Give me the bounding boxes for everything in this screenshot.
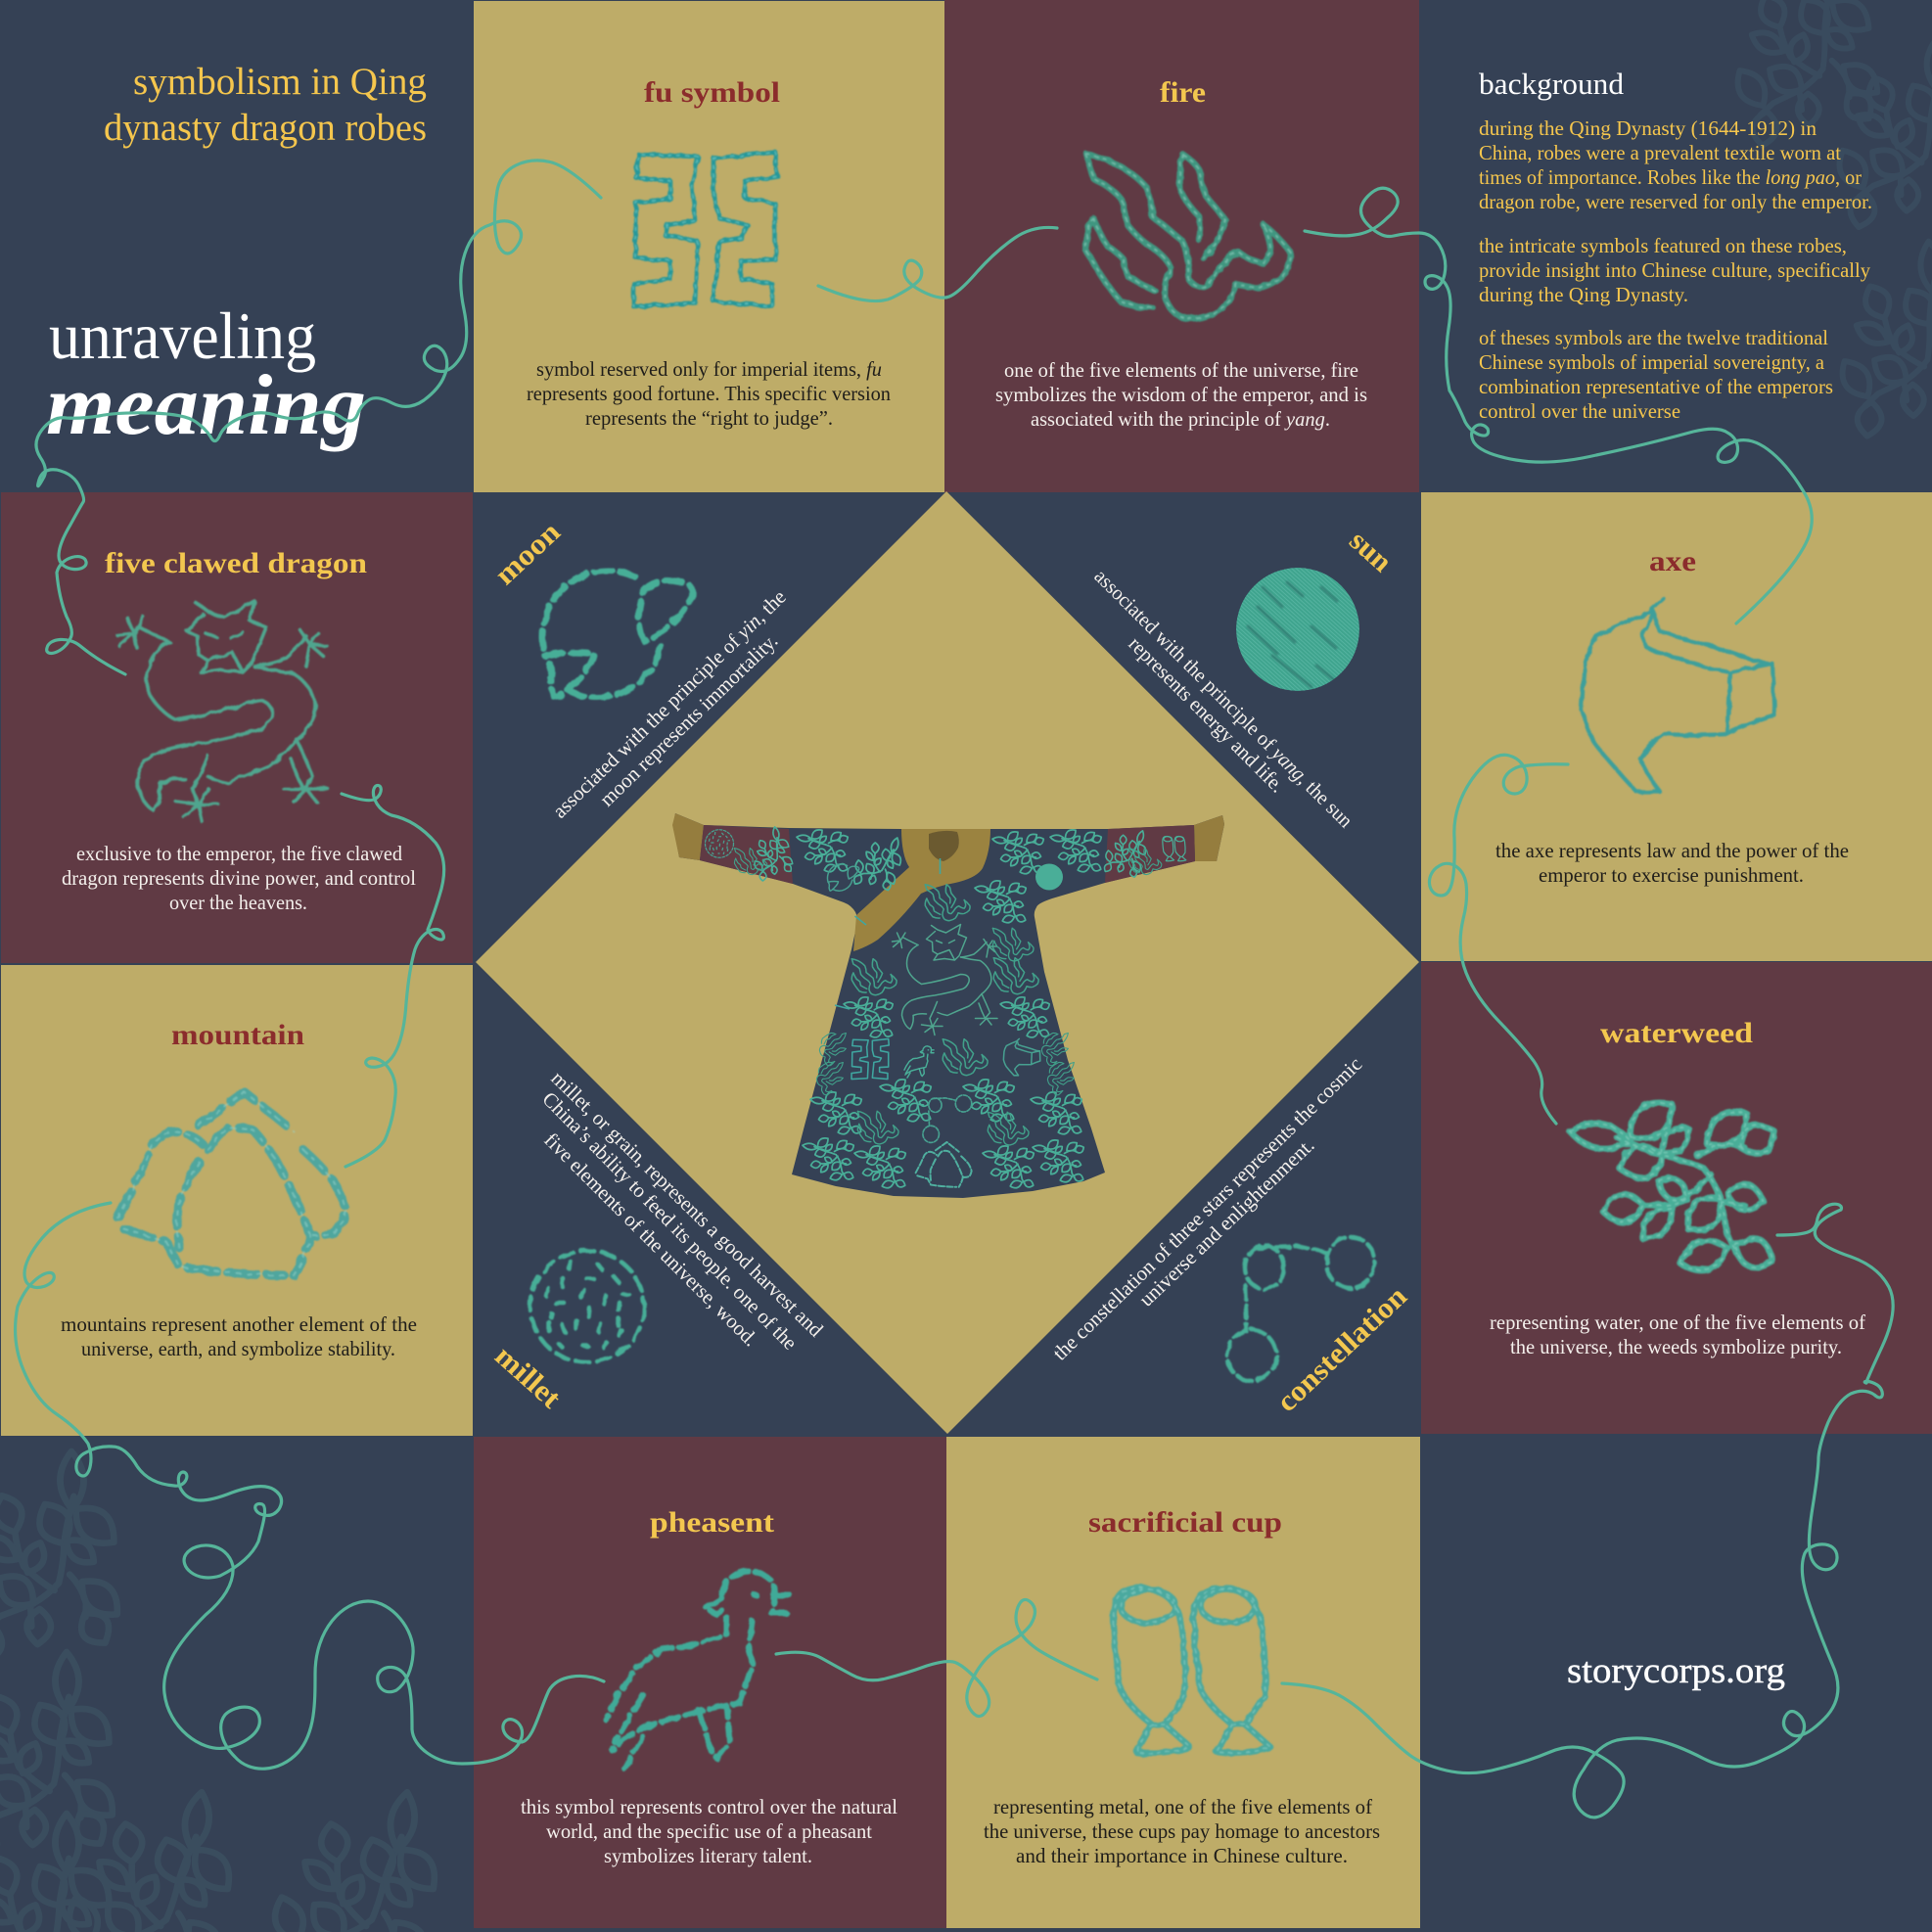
embroidered axe (1003, 1038, 1040, 1076)
paragraphs: background: of theses symbols are the twelve traditional (1479, 326, 1828, 349)
text: sun description: represents energy and life. (1124, 632, 1289, 798)
text: waterweed description: representing water, one of the five elements of (1490, 1311, 1865, 1334)
text: pheasent description (521, 1795, 897, 1867)
heading: waterweed: waterweed (1600, 1017, 1753, 1049)
text: pheasent description: world, and the specific use of a pheasant (546, 1819, 872, 1843)
text: fire description (995, 358, 1367, 431)
icon: constellation (1227, 1237, 1375, 1381)
thread: fu symbol to title to dragon (36, 161, 601, 674)
text: dragon description: over the heavens. (169, 891, 307, 914)
icon: pheasant (606, 1571, 790, 1769)
paragraphs: background: provide insight into Chinese culture, specifically (1479, 258, 1870, 282)
thread: waterweed to axe (1429, 755, 1568, 1124)
text: fire description: one of the five elements of the universe, fire (1004, 358, 1358, 382)
icon: sun (1236, 568, 1359, 691)
text: mountain description: mountains represent another element of the (61, 1312, 417, 1336)
panel: waterweed (1421, 962, 1932, 1434)
heading: fu symbol: fu symbol (644, 76, 780, 109)
corner: millet (488, 1066, 828, 1414)
text: axe description: the axe represents law and the power of the (1495, 839, 1849, 862)
heading: five clawed dragon: five clawed dragon (105, 547, 367, 579)
icon: moon (542, 571, 692, 698)
corner: moon (488, 516, 791, 823)
heading: axe: axe (1649, 545, 1696, 577)
paragraphs: background: during the Qing Dynasty (1644-1912) in (1479, 116, 1817, 140)
text: millet description: China’s ability to feed its people. one of the (537, 1087, 802, 1355)
text: cup description: and their importance in Chinese culture. (1016, 1844, 1348, 1867)
text: fu description: symbol reserved only for imperial items, fu (536, 357, 882, 381)
icon: fu symbol (633, 152, 777, 306)
heading: millet: millet (488, 1340, 567, 1414)
text: fu description: represents good fortune. This specific version (527, 382, 891, 405)
text: sun description: associated with the principle of yang, the sun (1089, 565, 1357, 833)
text: axe description: emperor to exercise punishment. (1539, 863, 1804, 887)
paragraphs: background: control over the universe (1479, 399, 1680, 423)
embroidered mountain (916, 1142, 972, 1187)
thread: pheasant to cup (776, 1599, 1097, 1717)
text: pheasent description: this symbol represents control over the natural (521, 1795, 897, 1818)
right sleeve band (1105, 825, 1195, 883)
paragraphs: background: China, robes were a prevalent textile worn at (1479, 141, 1841, 164)
icon: fire (1086, 155, 1290, 319)
embroidered cups (1163, 837, 1186, 861)
text: pheasent description: symbolizes literary talent. (604, 1844, 812, 1867)
icon: waterweed (1570, 1103, 1774, 1270)
text: waterweed description (1490, 1311, 1865, 1358)
thread: mountain to pheasant (16, 1203, 604, 1769)
text: millet description: five elements of the universe, wood. (539, 1128, 762, 1351)
text: dragon description (62, 842, 416, 914)
icon: axe (1582, 599, 1774, 792)
collar (853, 829, 990, 951)
icon: dragon (117, 601, 328, 822)
heading: fire: fire (1160, 76, 1206, 109)
text: cup description: the universe, these cups pay homage to ancestors (984, 1819, 1380, 1843)
heading: moon: moon (488, 516, 567, 591)
heading: sacrificial cup: sacrificial cup (1088, 1506, 1282, 1539)
text: millet description: millet, or grain, represents a good harvest and (547, 1066, 828, 1342)
embroidered fu (851, 1038, 889, 1080)
robe body (673, 813, 1224, 1198)
main title (46, 299, 366, 453)
main title: unraveling (49, 299, 316, 373)
left cuff (672, 813, 704, 860)
neck opening (929, 831, 959, 861)
central diamond (476, 491, 1419, 1434)
text: dragon description: dragon represents divine power, and control (62, 866, 416, 890)
paragraphs: background: the intricate symbols featured on these robes, (1479, 234, 1847, 257)
text: mountain description (61, 1312, 417, 1360)
text: axe description (1495, 839, 1849, 887)
text: moon description: associated with the principle of yin, the (548, 585, 791, 823)
main title: meaning (46, 358, 366, 453)
panel: fu symbol (474, 1, 944, 492)
embroidered fire (734, 849, 1162, 1145)
paragraphs: background: combination representative of the emperors (1479, 375, 1833, 398)
text block: background (1479, 67, 1872, 423)
panel: mountain (1, 965, 473, 1436)
heading: sun: sun (1343, 525, 1399, 578)
heading: background: background (1479, 67, 1625, 101)
paragraphs: background: during the Qing Dynasty. (1479, 283, 1688, 306)
text: fu description (527, 357, 891, 430)
embroidered constellation (923, 1095, 972, 1142)
embroidered millet (705, 830, 734, 857)
thread: dragon to mountain (342, 785, 444, 1167)
robe ties (835, 858, 940, 1009)
heading: pheasent: pheasent (650, 1506, 774, 1539)
panel: fire (944, 0, 1419, 492)
thread: fu symbol to fire (818, 227, 1057, 301)
paragraphs: background: dragon robe, were reserved for only the emperor. (1479, 190, 1872, 213)
text: fire description: associated with the principle of yang. (1031, 407, 1330, 431)
right cuff (1194, 815, 1224, 861)
thread: cup to waterweed (1282, 1204, 1893, 1817)
text: cup description: representing metal, one of the five elements of (993, 1795, 1372, 1818)
icon: mountain (117, 1092, 345, 1275)
panel: axe (1421, 492, 1932, 961)
heading: constellation: constellation (1270, 1280, 1413, 1418)
title block (46, 61, 427, 453)
subtitle: dynasty dragon robes (104, 107, 427, 149)
corner: constellation (1048, 1052, 1413, 1418)
subtitle: symbolism in Qing (133, 61, 427, 103)
left sleeve band (700, 825, 793, 884)
decorative leaf pattern: bottom left (0, 1447, 435, 1932)
text: waterweed description: the universe, the weeds symbolize purity. (1510, 1335, 1842, 1358)
subtitle (104, 61, 427, 149)
panel: five clawed dragon (1, 492, 473, 963)
icon: sacrificial cups (1114, 1588, 1270, 1753)
illustration: dragon robe (672, 813, 1224, 1198)
text: cup description (984, 1795, 1380, 1867)
thread: axe to fire (1305, 188, 1812, 623)
embroidered waterweeds (745, 825, 1149, 1188)
text: moon description: moon represents immortality. (595, 629, 782, 811)
text: constellation description: the constellation of three stars represents the cosmic (1048, 1052, 1366, 1365)
text: dragon description: exclusive to the emperor, the five clawed (76, 842, 402, 865)
text: mountain description: universe, earth, and symbolize stability. (81, 1337, 395, 1360)
embroidered sun (1035, 863, 1063, 891)
panel: pheasent (474, 1437, 947, 1928)
link text: storycorps.org: storycorps.org (1567, 1651, 1785, 1691)
heading: mountain: mountain (171, 1019, 304, 1051)
text: fire description: symbolizes the wisdom of the emperor, and is (995, 383, 1367, 406)
decorative leaf pattern: top right (1710, 0, 1932, 439)
panel: sacrificial cup (946, 1437, 1420, 1928)
embroidered pheasant (904, 1046, 934, 1078)
embroidered moon (827, 864, 859, 891)
paragraphs: background: Chinese symbols of imperial sovereignty, a (1479, 350, 1825, 374)
paragraphs: background: times of importance. Robes like the long pao, or (1479, 165, 1862, 189)
paragraphs: background (1479, 116, 1872, 423)
icon: millet (530, 1251, 644, 1362)
text: fu description: represents the “right to judge”. (585, 406, 833, 430)
embroidered dragon (893, 924, 997, 1035)
corner: sun (1089, 525, 1399, 833)
text: constellation description: universe and enlightenment. (1134, 1133, 1319, 1311)
